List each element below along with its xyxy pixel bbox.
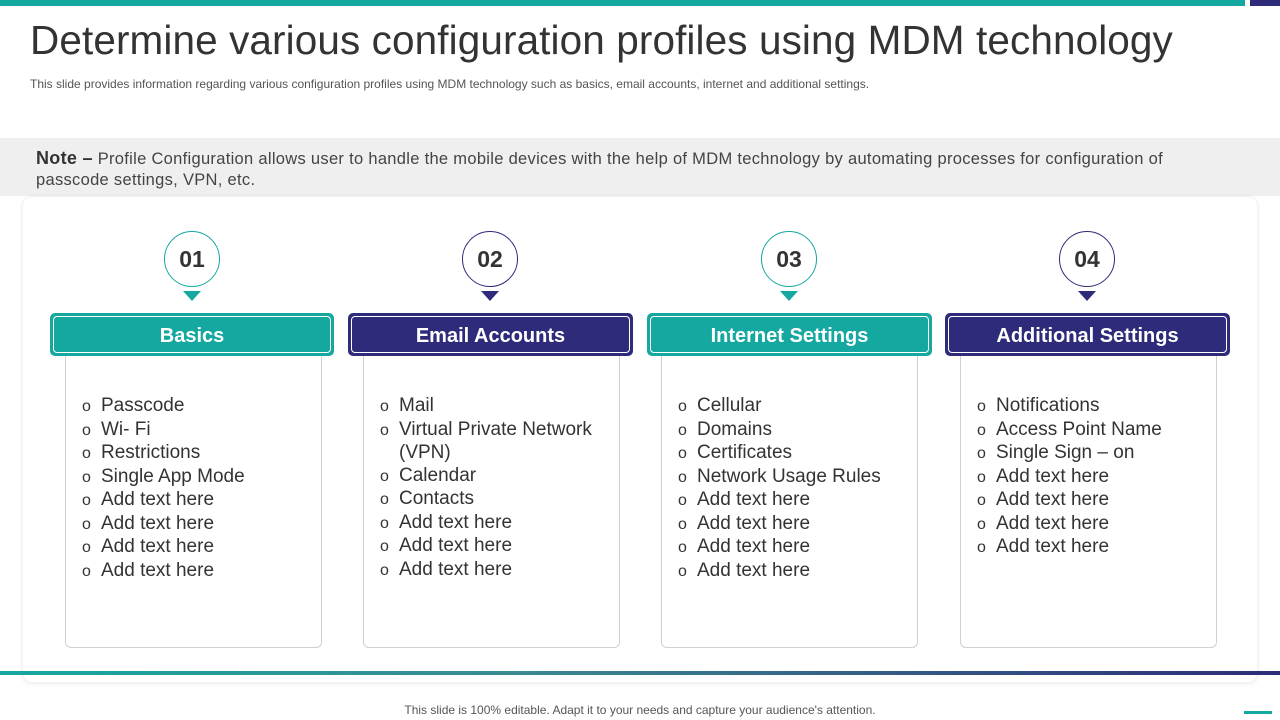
circle 04: 04 <box>1074 246 1100 272</box>
list: Basics: o <box>82 398 91 415</box>
note band <box>0 138 1280 196</box>
list: Basics: Wi- Fi <box>101 418 151 440</box>
list: Basics: o <box>82 516 91 532</box>
list: Internet: Add text here <box>697 489 810 510</box>
list: Basics: o <box>82 492 91 509</box>
column 4 <box>1059 231 1115 301</box>
list: Additional: o <box>977 492 986 509</box>
list: Email: o <box>380 468 389 484</box>
header: Internet Settings <box>647 313 932 356</box>
footer text: This slide is 100% editable. Adapt it to your needs and capture your audience's attention. <box>404 703 876 717</box>
header: Additional Settings: Additional Settings <box>996 325 1179 347</box>
list: Internet: o <box>678 562 687 580</box>
list: Basics: Add text here <box>101 489 214 510</box>
list: Email: Contacts <box>399 488 474 509</box>
list: Internet: Cellular <box>697 395 761 416</box>
list: Additional: o <box>977 516 986 532</box>
list: Basics: o <box>82 562 91 580</box>
triangle <box>481 291 499 301</box>
list: Additional: Notifications <box>996 395 1100 416</box>
list: Basics <box>65 356 322 648</box>
list: Additional: Add text here <box>996 512 1109 534</box>
list: Internet: o <box>678 492 687 509</box>
list: Email: Calendar <box>399 464 476 486</box>
circle 01: 01 <box>179 246 205 272</box>
list: Additional: Single Sign – on <box>996 442 1134 463</box>
list: Internet: o <box>678 516 687 532</box>
list: Basics: o <box>82 468 91 486</box>
header: Basics: Basics <box>160 325 224 347</box>
triangle <box>780 291 798 301</box>
list: Internet: o <box>678 398 687 415</box>
circle 02: 02 <box>477 246 503 272</box>
list: Email: Mail <box>399 395 434 416</box>
note band: Note – Profile Configuration allows user to handle the mobile devices with the help of MDM technology by automating processes for configuration of passcode settings, VPN, etc. <box>36 148 1163 189</box>
list: Additional: o <box>977 398 986 415</box>
list: Email: o <box>380 538 389 555</box>
list: Email: o <box>380 514 389 532</box>
list: Internet: Add text here <box>697 560 810 580</box>
list: Basics: o <box>82 445 91 462</box>
footer accent <box>1244 711 1272 714</box>
list: Additional: o <box>977 468 986 486</box>
column 2 <box>462 231 518 301</box>
list: Internet: Network Usage Rules <box>697 466 881 486</box>
list: Internet <box>661 356 918 648</box>
list: Email: o <box>380 491 389 508</box>
triangle <box>183 291 201 301</box>
list: Additional: Add text here <box>996 489 1109 510</box>
list: Additional: o <box>977 445 986 462</box>
list: Basics: o <box>82 539 91 556</box>
circle 03: 03 <box>776 246 802 272</box>
bottom gradient bar <box>0 671 1280 675</box>
circle 03 <box>761 231 817 287</box>
circle 02 <box>462 231 518 287</box>
list: Internet: Certificates <box>697 442 792 463</box>
title: Determine various configuration profiles using MDM technology <box>30 17 1173 63</box>
list: Email: Virtual Private Network (VPN) <box>399 418 592 463</box>
circle 04 <box>1059 231 1115 287</box>
main card <box>22 196 1258 683</box>
list: Internet: Add text here <box>697 512 810 534</box>
header: Basics <box>50 313 334 356</box>
list: Email <box>363 356 620 648</box>
list: Email: Add text here <box>399 512 512 532</box>
list: Basics: Add text here <box>101 560 214 580</box>
list: Basics: Restrictions <box>101 442 200 463</box>
list: Internet: o <box>678 539 687 556</box>
list: Additional: Add text here <box>996 466 1109 486</box>
list: Basics: Add text here <box>101 512 214 534</box>
list: Basics: Add text here <box>101 536 214 557</box>
circle 01 <box>164 231 220 287</box>
list: Email: Add text here <box>399 558 512 580</box>
list: Internet: o <box>678 422 687 438</box>
triangle <box>1078 291 1096 301</box>
header: Email Accounts <box>348 313 633 356</box>
column 3 <box>761 231 817 301</box>
list: Additional: Add text here <box>996 536 1109 557</box>
list: Additional <box>960 356 1217 648</box>
list: Internet: Domains <box>697 418 772 440</box>
list: Additional: Access Point Name <box>996 418 1162 440</box>
list: Email: o <box>380 422 389 438</box>
subtitle: This slide provides information regarding various configuration profiles using MDM technology such as basics, email accounts, internet and additional settings. <box>30 77 869 91</box>
column 1 <box>164 231 220 301</box>
header: Additional Settings <box>945 313 1230 356</box>
list: Additional: o <box>977 422 986 438</box>
list: Basics: Passcode <box>101 395 184 416</box>
list: Internet: o <box>678 445 687 462</box>
list: Basics: Single App Mode <box>101 466 245 486</box>
list: Email: o <box>380 562 389 578</box>
list: Basics: o <box>82 422 91 438</box>
list: Email: Add text here <box>399 535 512 556</box>
list: Internet: o <box>678 468 687 486</box>
header: Email Accounts: Email Accounts <box>416 325 565 347</box>
list: Email: o <box>380 398 389 415</box>
top bar <box>0 0 1245 6</box>
header: Internet Settings: Internet Settings <box>711 325 868 347</box>
list: Internet: Add text here <box>697 536 810 557</box>
list: Additional: o <box>977 539 986 556</box>
